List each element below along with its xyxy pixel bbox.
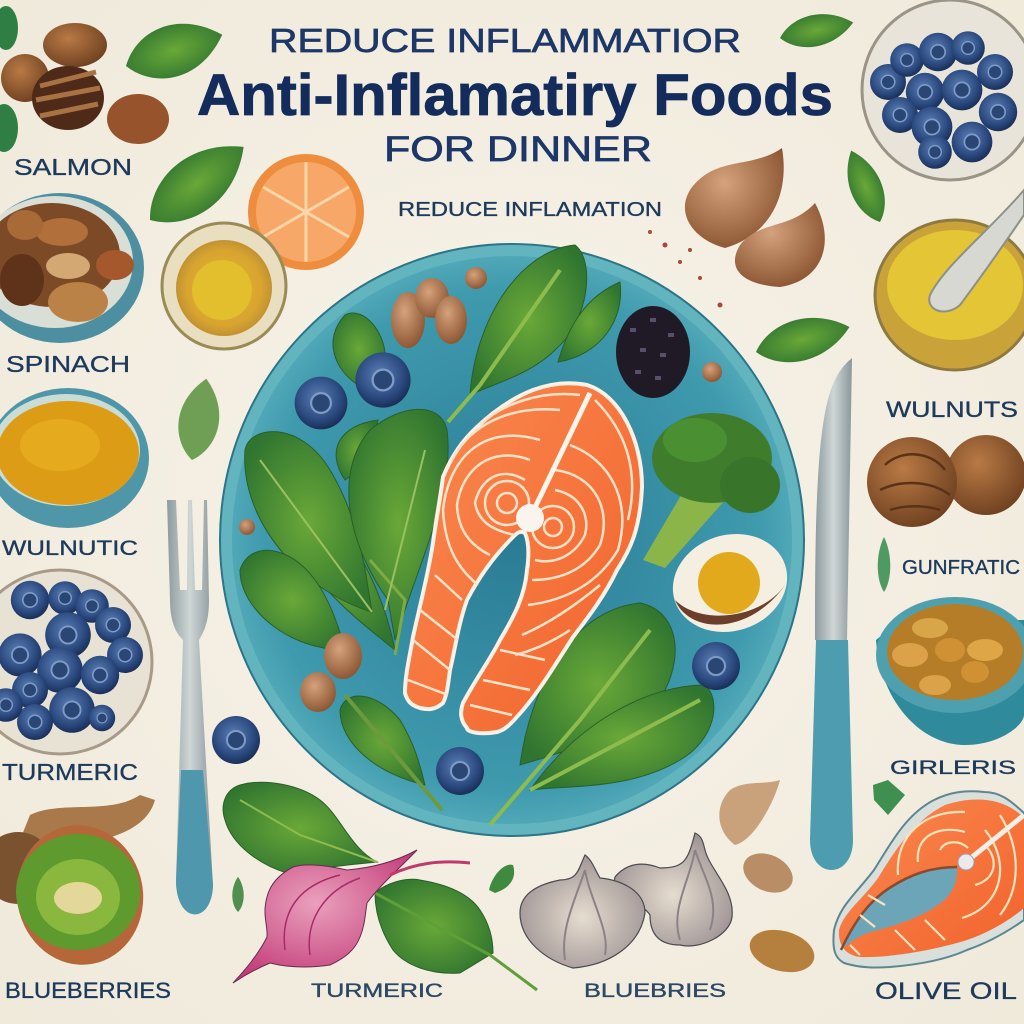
icon: small leaf <box>878 537 890 592</box>
icon: small leaf bottom <box>489 865 514 893</box>
icon: kale sprig <box>232 877 244 912</box>
icon: garlic clove small <box>737 846 799 900</box>
label: turmeric left: TURMERIC <box>2 759 138 785</box>
label: girleris: GIRLERIS <box>890 758 1016 779</box>
heading: reduce inflammatior: REDUCE INFLAMMATIOR <box>269 22 741 59</box>
heading: for dinner: FOR DINNER <box>384 130 652 169</box>
icon: spinach leaf bottom <box>223 782 377 873</box>
main title: Anti-Inflamatiry Foods <box>197 63 833 128</box>
label: turmeric bottom: TURMERIC <box>311 981 443 1002</box>
label: blueberries bottom: BLUEBRIES <box>584 981 726 1002</box>
decorative top-left nuts <box>0 6 169 152</box>
fork <box>167 500 213 914</box>
icon: spinach leaf bottom right <box>375 879 537 990</box>
small leaf left of plate <box>172 375 226 463</box>
label: blueberries left: BLUEBERRIES <box>5 978 171 1003</box>
icon: root and kiwi <box>0 795 155 975</box>
icon: leaf <box>133 125 260 241</box>
icon: bowl of turmeric <box>0 388 149 528</box>
icon: bowl of walnuts <box>0 193 144 343</box>
nuts on plate <box>239 267 722 712</box>
icon: small leaf right <box>873 780 905 815</box>
label: salmon: SALMON <box>14 154 132 180</box>
top-right leaf <box>777 7 856 53</box>
knife <box>810 358 853 870</box>
label: spinach: SPINACH <box>6 351 130 377</box>
spinach top <box>448 245 621 422</box>
icon: orange slice <box>248 154 364 270</box>
blueberry bowl right <box>862 0 1024 180</box>
broccoli <box>643 413 780 568</box>
blueberry beside plate <box>212 716 260 764</box>
spinach bottom left <box>340 695 442 810</box>
spinach cluster left on plate <box>240 313 448 655</box>
icon: garlic bulbs <box>520 833 732 968</box>
icon: bowl of nuts <box>876 597 1024 745</box>
icon: leaf right <box>837 145 895 228</box>
title block <box>197 22 833 169</box>
icon: shallots <box>685 148 825 287</box>
icon: salmon steak right <box>833 791 1024 968</box>
icon: whole walnuts <box>867 435 1024 527</box>
icon: garlic clove <box>719 780 780 845</box>
subtitle: REDUCE INFLAMATION <box>398 199 662 221</box>
label: wulnutic: WULNUTIC <box>2 537 138 560</box>
plate <box>220 244 804 836</box>
icon: oil jar with spoon <box>875 190 1024 370</box>
icon: leaf mid right <box>751 307 855 372</box>
icon: beet <box>233 850 470 983</box>
icon: leaf top-left <box>118 10 230 90</box>
icon: glass of oil <box>162 223 286 349</box>
spinach bottom right <box>490 603 714 825</box>
icon: garlic clove bottom <box>745 923 819 979</box>
icon: blueberry bowl left <box>0 570 152 754</box>
egg <box>660 519 800 647</box>
salmon steak <box>405 383 642 733</box>
blackberry <box>616 306 690 398</box>
label: wulnuts: WULNUTS <box>886 397 1018 422</box>
sprinkled spices <box>648 230 722 308</box>
label: olive oil: OLIVE OIL <box>875 978 1017 1005</box>
label: gunfratic: GUNFRATIC <box>902 557 1020 579</box>
plate blueberries <box>295 352 740 795</box>
